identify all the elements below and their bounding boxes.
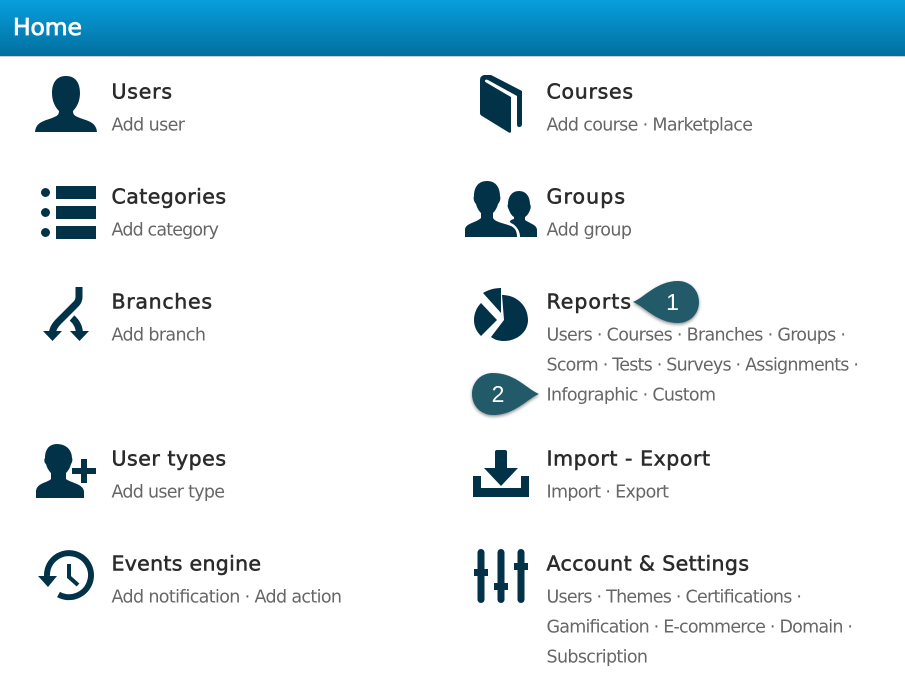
header title: Home xyxy=(13,13,82,41)
links: account settings: Users · Themes · Certifications · xyxy=(546,588,802,608)
heading: user types: User types xyxy=(112,446,226,470)
panel: import export xyxy=(473,446,710,502)
icon: download tray xyxy=(473,450,529,497)
icon: history clock xyxy=(38,553,91,597)
panel: events engine xyxy=(38,552,342,608)
icon: book xyxy=(480,75,522,133)
links: reports: Infographic · Custom xyxy=(546,386,716,406)
icon: groups xyxy=(465,181,537,237)
heading: branches: Branches xyxy=(112,290,212,314)
heading: import export: Import - Export xyxy=(546,446,710,470)
callout: 2: 2 xyxy=(492,381,504,407)
heading: reports: Reports xyxy=(546,290,631,314)
icon: branches xyxy=(43,287,89,341)
panel: reports xyxy=(474,288,859,406)
links: branches: Add branch xyxy=(112,326,206,346)
icon: list xyxy=(41,186,96,239)
links: import export: Import · Export xyxy=(546,482,669,502)
heading: courses: Courses xyxy=(546,80,633,104)
links: users: Add user xyxy=(112,116,186,136)
heading: groups: Groups xyxy=(546,184,625,208)
panel: account settings xyxy=(474,549,853,668)
panel: groups xyxy=(465,181,632,240)
icon: user plus xyxy=(36,444,96,498)
panel: user types xyxy=(36,444,226,502)
header bar xyxy=(0,0,905,57)
links: courses: Add course · Marketplace xyxy=(546,116,753,136)
links: account settings xyxy=(546,588,853,668)
panel: courses xyxy=(480,75,753,136)
callout: 1 xyxy=(633,281,699,323)
links: reports: Users · Courses · Branches · Groups · xyxy=(546,326,846,346)
icon: pie chart xyxy=(474,288,528,341)
links: account settings: Gamification · E-commerce · Domain · xyxy=(546,618,853,638)
links: reports: Scorm · Tests · Surveys · Assignments · xyxy=(546,356,859,376)
links: reports xyxy=(546,326,859,406)
icon: sliders xyxy=(474,549,528,603)
panel: users xyxy=(35,76,186,136)
icon: user xyxy=(35,76,97,132)
links: account settings: Subscription xyxy=(546,648,648,668)
links: groups: Add group xyxy=(546,220,632,240)
heading: users: Users xyxy=(112,80,172,104)
links: categories: Add category xyxy=(112,220,219,240)
callout: 2 xyxy=(472,373,539,415)
heading: account settings: Account & Settings xyxy=(546,552,749,576)
panel: branches xyxy=(43,287,212,346)
heading: events engine: Events engine xyxy=(112,552,261,576)
panel: categories xyxy=(41,184,226,240)
callout: 1: 1 xyxy=(666,289,679,315)
heading: categories: Categories xyxy=(112,184,226,208)
links: user types: Add user type xyxy=(112,482,225,502)
links: events engine: Add notification · Add action xyxy=(112,588,342,608)
